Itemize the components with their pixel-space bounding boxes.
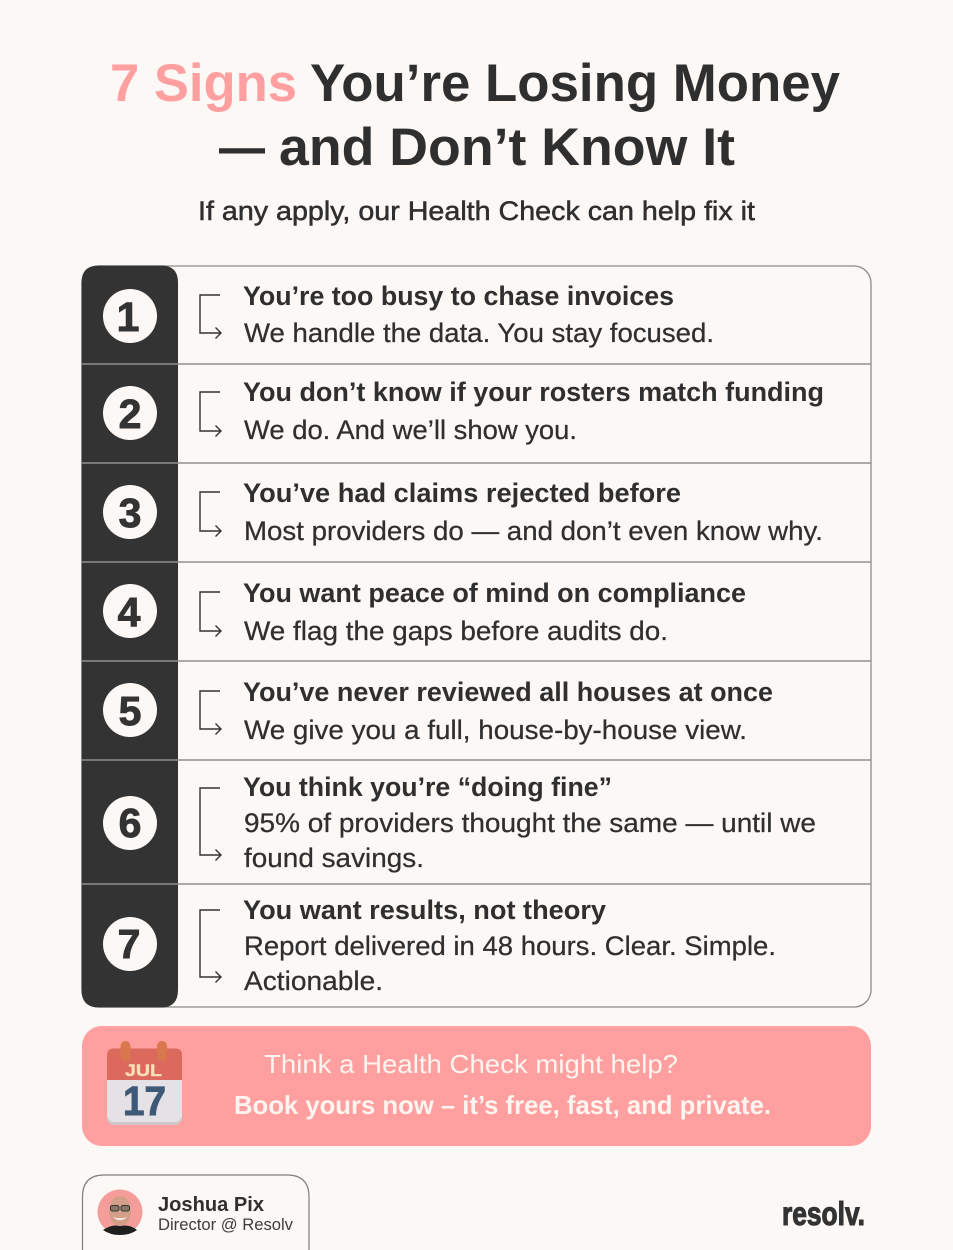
sign 2 bbox=[103, 377, 824, 445]
panel: seven signs list bbox=[82, 266, 871, 1008]
sign 7: Report delivered in 48 hours. Clear. Simple. bbox=[244, 931, 776, 961]
sign 4: We flag the gaps before audits do. bbox=[244, 616, 668, 646]
banner text bbox=[234, 1049, 771, 1120]
sign 1: You’re too busy to chase invoices bbox=[243, 281, 674, 311]
title: and Don’t Know It bbox=[279, 118, 735, 177]
title: 7 Signs bbox=[110, 54, 297, 113]
sign 7: Actionable. bbox=[244, 966, 383, 996]
sign 1: 1 bbox=[117, 294, 139, 340]
sign 5: You’ve never reviewed all houses at once bbox=[243, 677, 773, 707]
sign 4: You want peace of mind on compliance bbox=[243, 578, 746, 608]
title bbox=[110, 54, 841, 177]
sign 6: found savings. bbox=[244, 843, 424, 873]
sign 1 bbox=[103, 281, 714, 348]
sign 7: 7 bbox=[118, 921, 140, 967]
sign 4: 4 bbox=[118, 589, 141, 635]
sign 6: You think you’re “doing fine” bbox=[243, 772, 612, 802]
sign 1: We handle the data. You stay focused. bbox=[244, 318, 714, 348]
sign 3: 3 bbox=[119, 490, 141, 536]
number column bbox=[82, 266, 178, 1008]
banner text: Book yours now – it’s free, fast, and private. bbox=[234, 1090, 771, 1120]
sign 3: You’ve had claims rejected before bbox=[243, 478, 681, 508]
title: You’re Losing Money bbox=[310, 54, 841, 113]
author card: Director @ Resolv bbox=[158, 1215, 293, 1234]
sign 5: We give you a full, house-by-house view. bbox=[244, 715, 747, 745]
sign 6 bbox=[103, 772, 816, 873]
icon: calendar bbox=[107, 1041, 182, 1125]
sign 7: You want results, not theory bbox=[243, 895, 606, 925]
avatar bbox=[98, 1190, 142, 1235]
sign 5 bbox=[103, 677, 773, 745]
author card bbox=[82, 1175, 309, 1250]
sign 4 bbox=[103, 578, 746, 646]
sign 2: We do. And we’ll show you. bbox=[244, 415, 577, 445]
sign 3 bbox=[103, 478, 823, 546]
sign 3: Most providers do — and don’t even know why. bbox=[244, 516, 823, 546]
sign 6: 95% of providers thought the same — until we bbox=[244, 808, 816, 838]
author card: Joshua Pix bbox=[158, 1194, 264, 1216]
row dividers bbox=[82, 364, 871, 884]
call to action banner bbox=[82, 1026, 871, 1146]
logo: resolv: resolv. bbox=[782, 1195, 865, 1232]
subtitle: If any apply, our Health Check can help fix it bbox=[198, 196, 756, 226]
icon: calendar: JUL bbox=[125, 1061, 162, 1080]
sign 7 bbox=[103, 895, 776, 996]
banner text: Think a Health Check might help? bbox=[264, 1049, 678, 1079]
sign 2: 2 bbox=[119, 391, 141, 437]
title: — bbox=[219, 118, 265, 177]
icon: calendar: 17 bbox=[123, 1078, 166, 1124]
sign 2: You don’t know if your rosters match funding bbox=[243, 377, 824, 407]
sign 5: 5 bbox=[119, 688, 141, 734]
sign 6: 6 bbox=[119, 800, 141, 846]
